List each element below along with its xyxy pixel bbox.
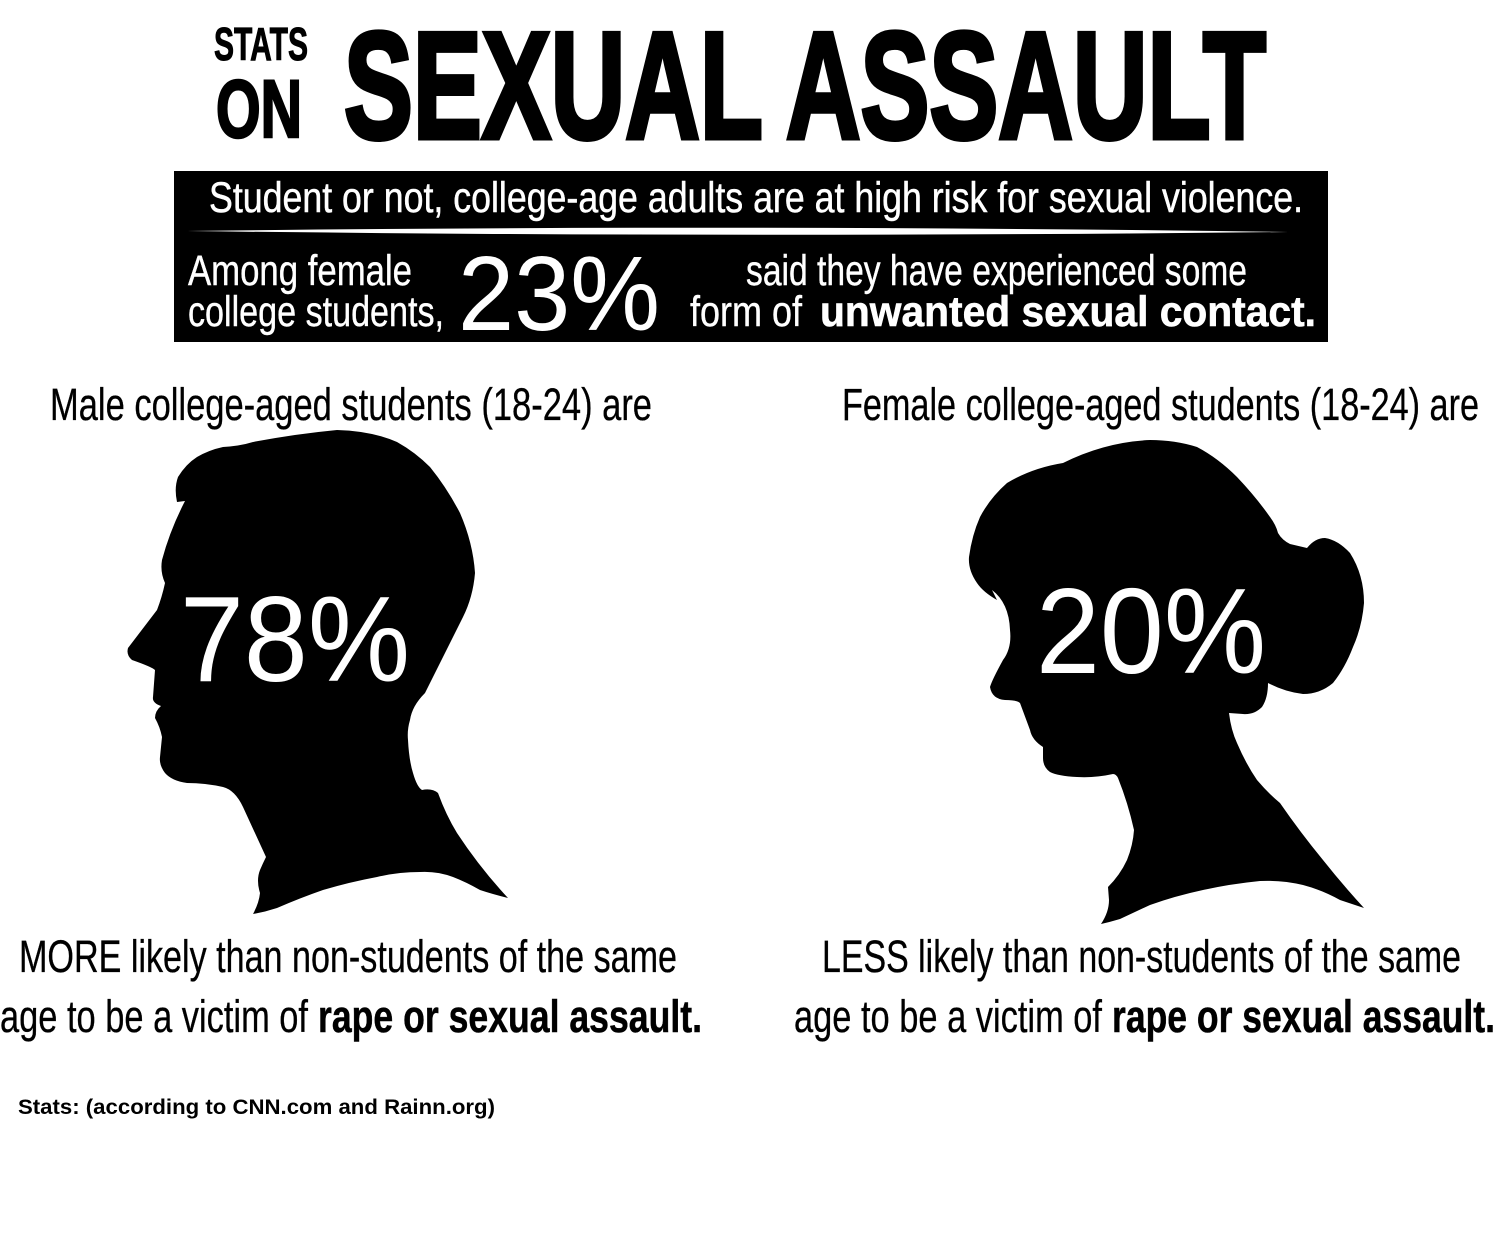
banner right text: form of	[690, 288, 803, 336]
icon: male head silhouette	[128, 430, 508, 914]
text: male conclusion: rape or sexual assault.	[318, 991, 702, 1042]
text: female conclusion: age to be a victim of	[794, 991, 1102, 1042]
banner left text: Among female	[188, 247, 412, 295]
banner divider	[187, 228, 1288, 235]
heading: male students: Male college-aged students (18-24) are	[50, 379, 652, 430]
banner right text: unwanted sexual contact.	[820, 288, 1316, 336]
text: female conclusion	[794, 931, 1495, 1042]
text: male conclusion	[0, 931, 702, 1042]
banner right text: said they have experienced some	[746, 247, 1247, 295]
title: ON	[216, 64, 302, 155]
banner headline: Student or not, college-age adults are at high risk for sexual violence.	[209, 174, 1303, 222]
panel: college-age risk banner	[174, 171, 1328, 353]
source note: Stats: (according to CNN.com and Rainn.org)	[18, 1096, 495, 1119]
statistic: male 78%: 78%	[180, 571, 410, 707]
banner left text: college students,	[188, 288, 444, 336]
banner right text	[690, 247, 1316, 336]
text: male conclusion: MORE likely than non-students of the same	[19, 931, 677, 982]
icon: female head silhouette	[969, 440, 1364, 924]
statistic: female 20%: 20%	[1036, 563, 1266, 699]
text: male conclusion: age to be a victim of	[0, 991, 308, 1042]
title: STATS	[214, 18, 308, 70]
banner left text	[188, 247, 444, 336]
banner statistic 23%: 23%	[458, 235, 660, 353]
